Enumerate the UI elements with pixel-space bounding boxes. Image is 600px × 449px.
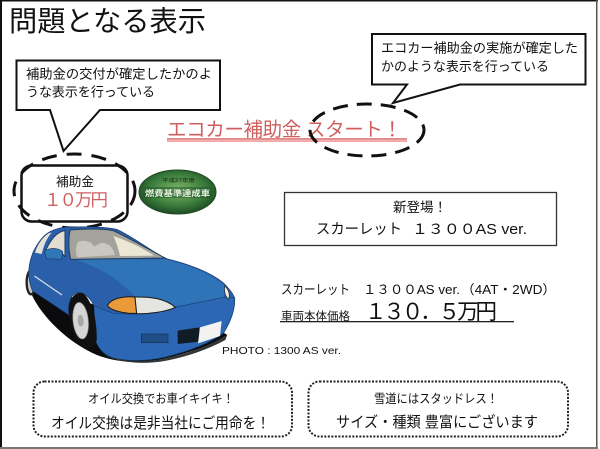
turn signal [107, 297, 137, 313]
license plate [198, 321, 222, 343]
wing mirror [44, 248, 63, 259]
car shadow [29, 288, 227, 362]
panel: oil change [34, 382, 292, 436]
windshield [69, 229, 165, 259]
callout: eco car subsidy [372, 34, 586, 103]
front wheel [69, 293, 97, 349]
dashed ellipse: subsidy [14, 154, 135, 228]
callout: eco car subsidy: かのような表示を行っている [381, 59, 549, 74]
new arrival box [284, 192, 556, 246]
price line: １３０．５万円 [365, 300, 497, 324]
fog lamp [141, 334, 168, 343]
panel: studless tires: 雪道にはスタッドレス！ [374, 391, 498, 406]
subsidy price box: 補助金 [56, 175, 94, 189]
right headlight [224, 286, 229, 299]
photo caption: PHOTO : 1300 AS ver. [222, 346, 341, 357]
new arrival box: １３００AS ver. [412, 222, 527, 238]
front splitter [100, 335, 227, 363]
icon: fuel standard badge [139, 170, 216, 214]
interior [113, 236, 154, 256]
bumper [94, 297, 235, 360]
side window [44, 231, 65, 257]
model spec line [281, 282, 556, 297]
model spec line: （4AT・2WD） [461, 282, 556, 297]
headlight [135, 297, 175, 314]
illustration: blue car [27, 227, 235, 363]
panel: studless tires [308, 382, 568, 436]
subsidy price box: １０万円 [44, 190, 108, 210]
callout: eco car subsidy: エコカー補助金の実施が確定した [381, 40, 578, 56]
callout: subsidy grant [16, 60, 220, 151]
price line: 車両本体価格 [281, 309, 350, 323]
new arrival box: 新登場！ [393, 200, 447, 215]
callout: subsidy grant: うな表示を行っている [26, 84, 155, 100]
callout: subsidy grant: 補助金の交付が確定したかのよ [26, 66, 212, 82]
icon: fuel standard badge: 平成27年度 [162, 177, 195, 184]
grille [178, 327, 199, 344]
subsidy price box [22, 166, 128, 222]
hood highlight [75, 259, 226, 307]
panel: oil change: オイル交換は是非当社にご用命を！ [51, 415, 270, 432]
red headline: エコカー補助金 スタート！ [167, 119, 402, 141]
car body [29, 227, 235, 360]
panel: oil change: オイル交換でお車イキイキ！ [88, 392, 234, 406]
title: 問題となる表示 [9, 6, 206, 38]
model spec line: スカーレット [281, 282, 350, 297]
rear wheel [27, 270, 35, 294]
model spec line: １３００AS ver. [363, 282, 460, 297]
icon: fuel standard badge: 燃費基準達成車 [145, 188, 210, 198]
price line [280, 300, 514, 324]
new arrival box: スカーレット [316, 222, 402, 238]
side stripe [34, 276, 62, 295]
panel: studless tires: サイズ・種類 豊富にございます [336, 413, 538, 431]
dashed ellipse: start [310, 104, 424, 156]
